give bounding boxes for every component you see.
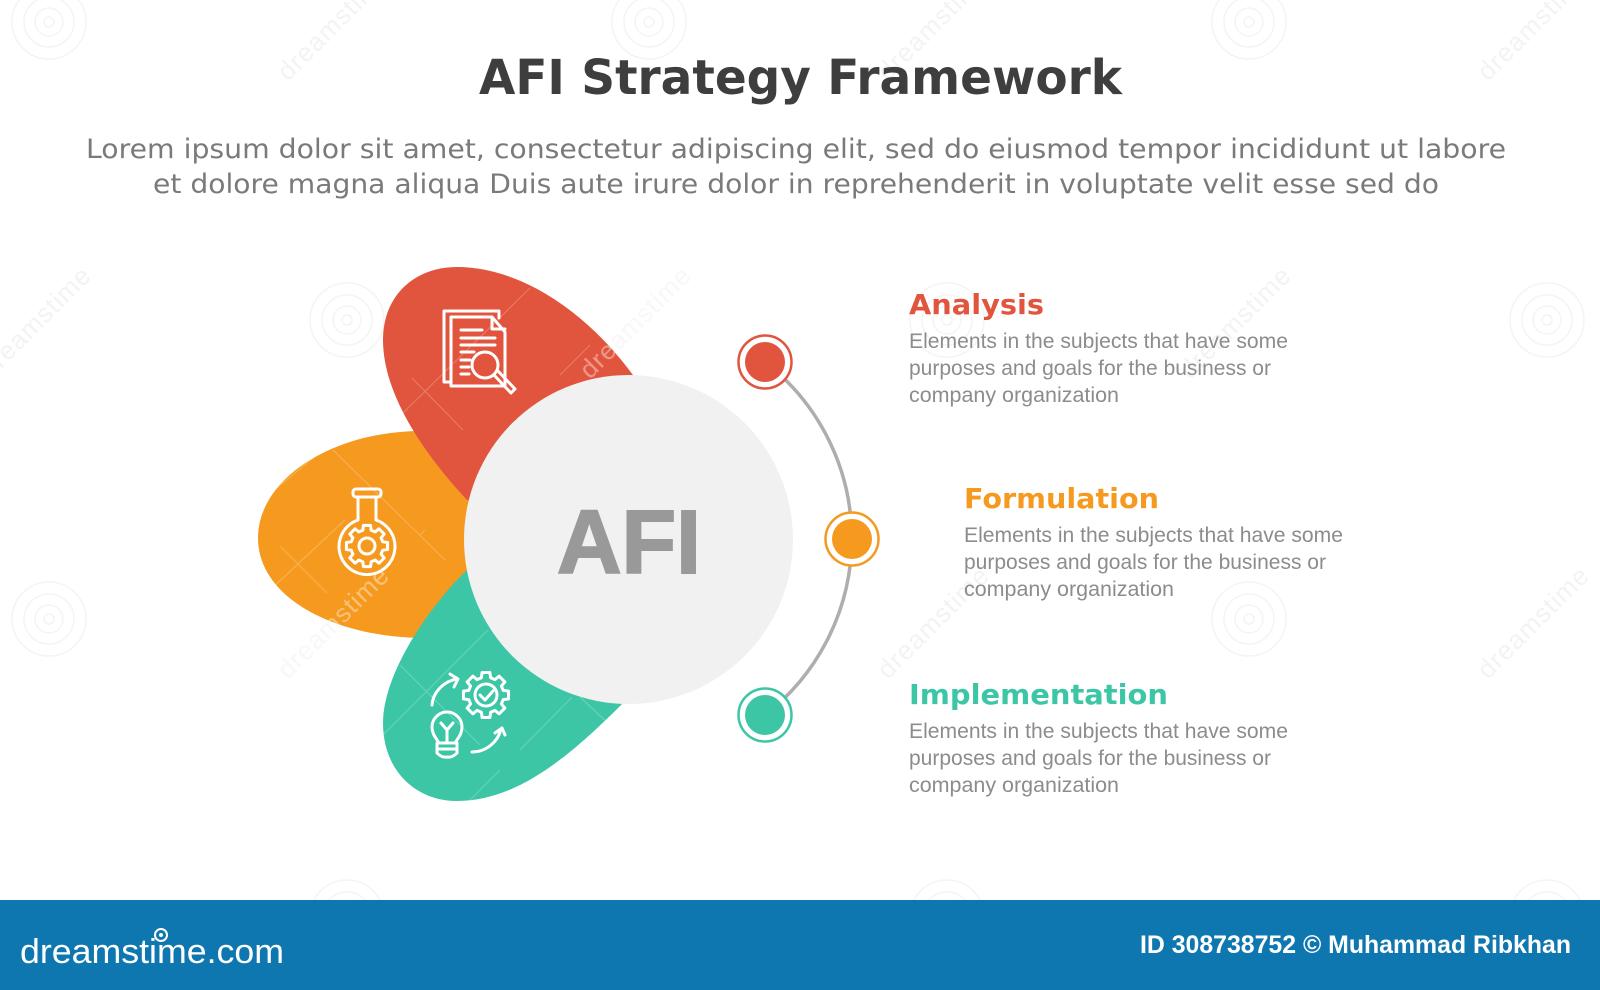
text: dreamstime [1173,260,1297,384]
text: dreamstime [1471,560,1595,684]
icon: document with magnifier [444,311,515,393]
subtitle text block: et dolore magna aliqua Duis aute irure dolor in reprehenderit in voluptate velit esse sed do [153,169,1439,200]
text: dreamstime [871,560,995,684]
subtitle text block: Lorem ipsum dolor sit amet, consectetur adipiscing elit, sed do eiusmod tempor incididunt ut labore [86,134,1506,165]
footer credit: ID 308738752 © Muhammad Ribkhan [1140,931,1571,959]
text block: formulation [964,482,1343,601]
text block: analysis: purposes and goals for the business or [909,357,1271,380]
node: analysis [738,336,792,388]
petal: formulation (orange) [258,431,520,640]
text block: analysis [909,288,1288,407]
petal: analysis (red) [383,267,640,540]
text block: analysis: company organization [909,384,1119,407]
text block: implementation [909,678,1288,797]
text block: implementation: Elements in the subjects that have some [909,720,1288,743]
center label: AFI [557,493,701,593]
text block: formulation: Formulation [964,482,1159,515]
petal: implementation (green) [383,540,632,801]
title: AFI Strategy Framework [479,50,1123,106]
center circle [464,375,793,704]
icon: flask with gear [339,489,395,575]
text: dreamstime [573,260,697,384]
node: formulation [826,512,878,566]
footer band [0,900,1600,990]
subtitle text block [86,134,1506,200]
text block: formulation: purposes and goals for the business or [964,551,1326,574]
text block: formulation: company organization [964,578,1174,601]
text: dreamstime [271,560,395,684]
text: dreamstime [271,560,395,684]
icon: gear, bulb and cycle arrows [432,672,509,757]
text: dreamstime [573,260,697,384]
text block: implementation: Implementation [909,678,1168,711]
text block: implementation: purposes and goals for the business or [909,747,1271,770]
text block: analysis: Elements in the subjects that have some [909,330,1288,353]
text block: analysis: Analysis [909,288,1044,321]
text block: formulation: Elements in the subjects that have some [964,524,1343,547]
text block: implementation: company organization [909,774,1119,797]
node: implementation [738,688,792,742]
footer logo: dreamstime.com [20,933,284,971]
connector arc [765,362,852,715]
